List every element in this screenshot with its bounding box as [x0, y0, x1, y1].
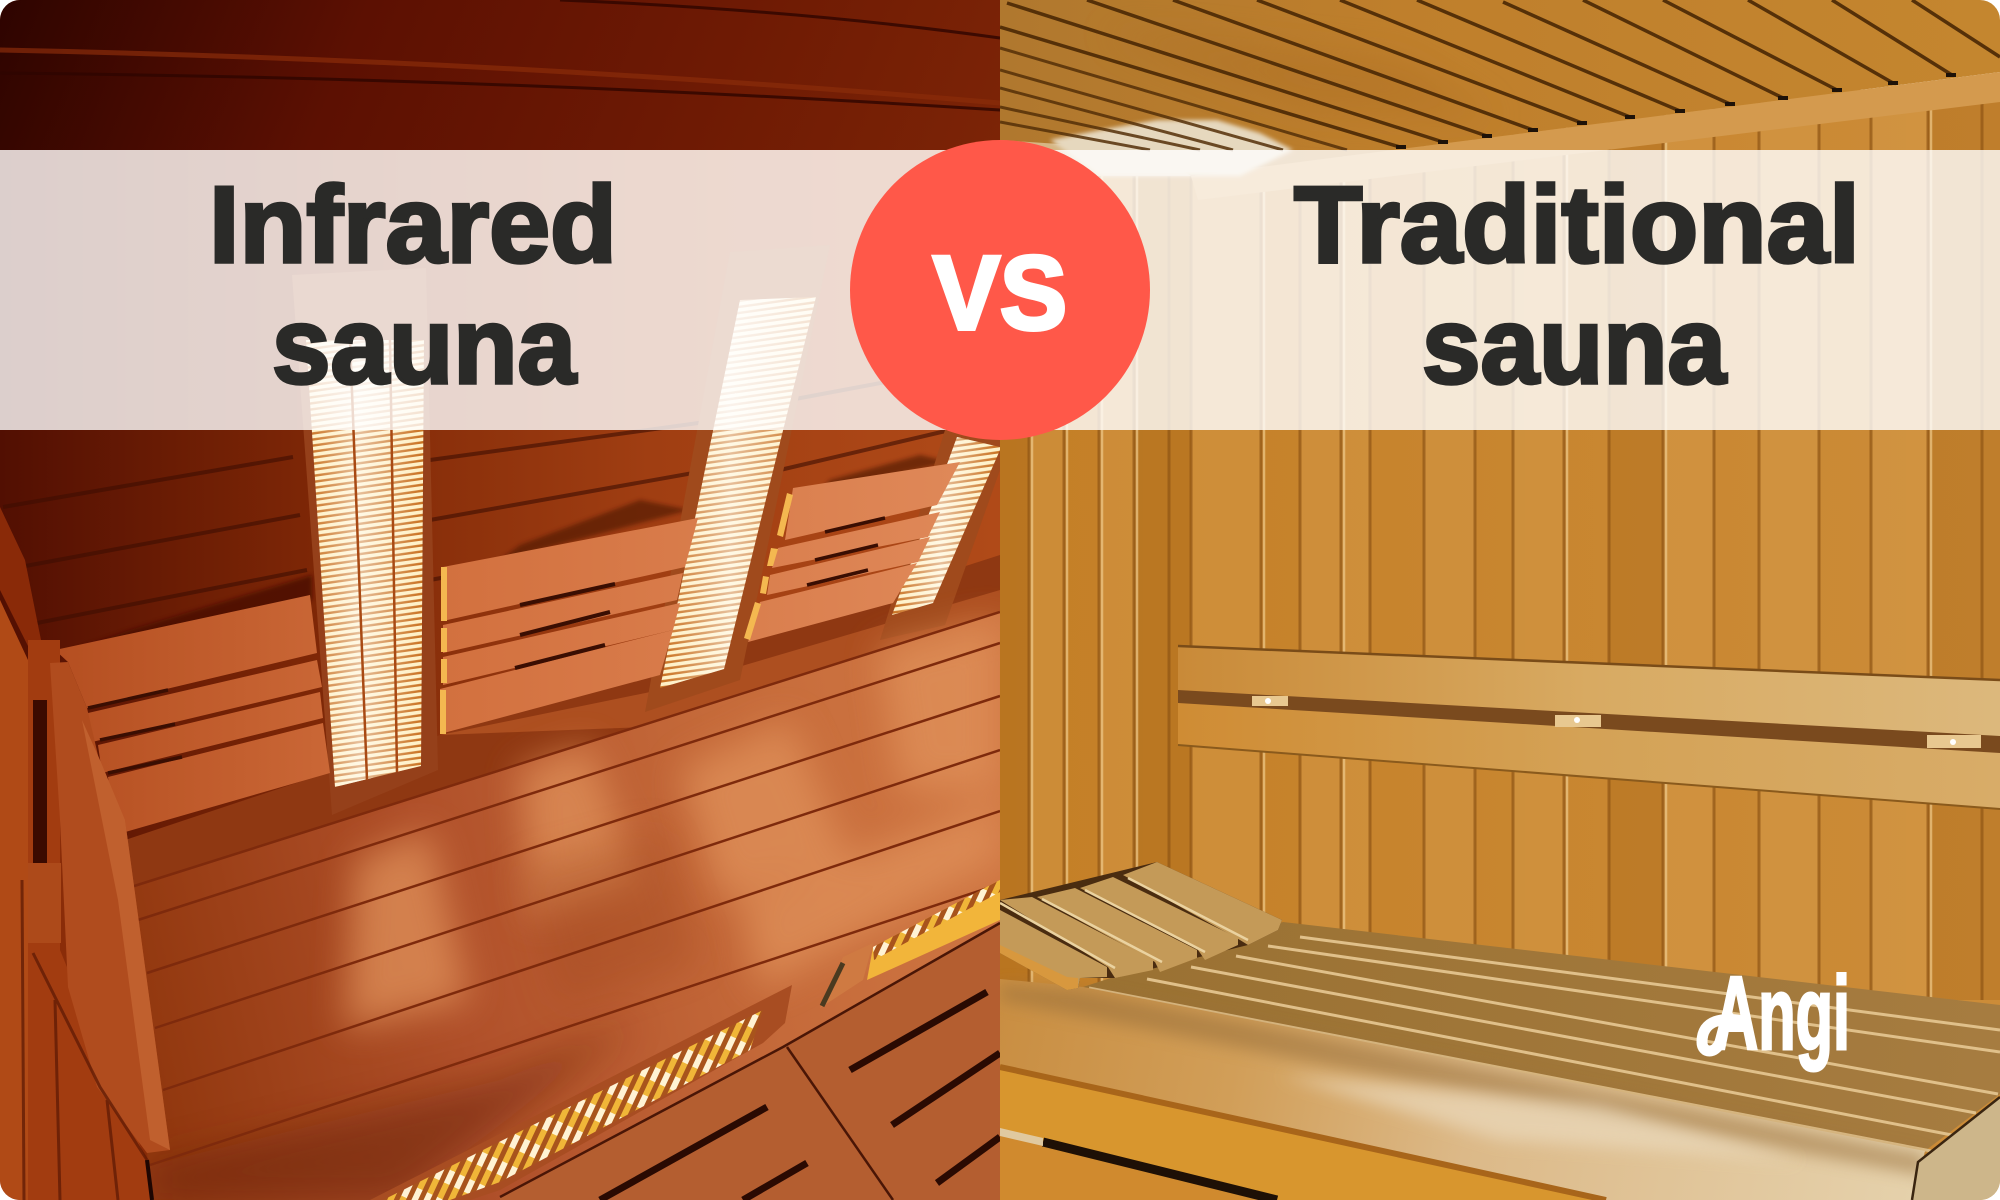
- heading: Traditional sauna: [1293, 181, 1854, 386]
- backrest boards: [1178, 646, 2000, 809]
- headrest: [1000, 862, 1282, 990]
- light patches on bench: [345, 620, 1000, 1030]
- VS badge: VS: [933, 235, 1067, 352]
- heading: Infrared sauna: [214, 181, 612, 386]
- Angi logo: [1696, 972, 1847, 1072]
- VS badge: [850, 140, 1150, 440]
- backrest slats: right: [744, 462, 960, 642]
- bench seat: [1000, 922, 2000, 1200]
- backrest slats: left: [55, 595, 330, 835]
- bench planks: [131, 611, 1000, 1200]
- overlay band behind headings: [0, 150, 2000, 430]
- wooden back wall: [0, 150, 1000, 890]
- panel: infrared sauna photo: [0, 0, 1000, 1200]
- lower heaters and slats: [370, 880, 1000, 1200]
- wood wall planks: [1000, 90, 2000, 1200]
- backrest slats: centre: [440, 518, 698, 734]
- ceiling planks and beam: [1000, 0, 2000, 200]
- ceiling and upper wall: [0, 0, 1000, 150]
- panel: traditional sauna photo: [1000, 0, 2000, 1200]
- Angi logo: Angi: [1714, 956, 1850, 1072]
- heading: Traditional sauna: sauna: [1422, 285, 1727, 407]
- heading: Traditional sauna: Traditional: [1294, 164, 1860, 286]
- side wall and armrest: [0, 600, 170, 1200]
- heading: Infrared sauna: sauna: [272, 285, 577, 407]
- heading: Infrared sauna: Infrared: [209, 164, 617, 286]
- infrared heater panels: [304, 297, 1000, 787]
